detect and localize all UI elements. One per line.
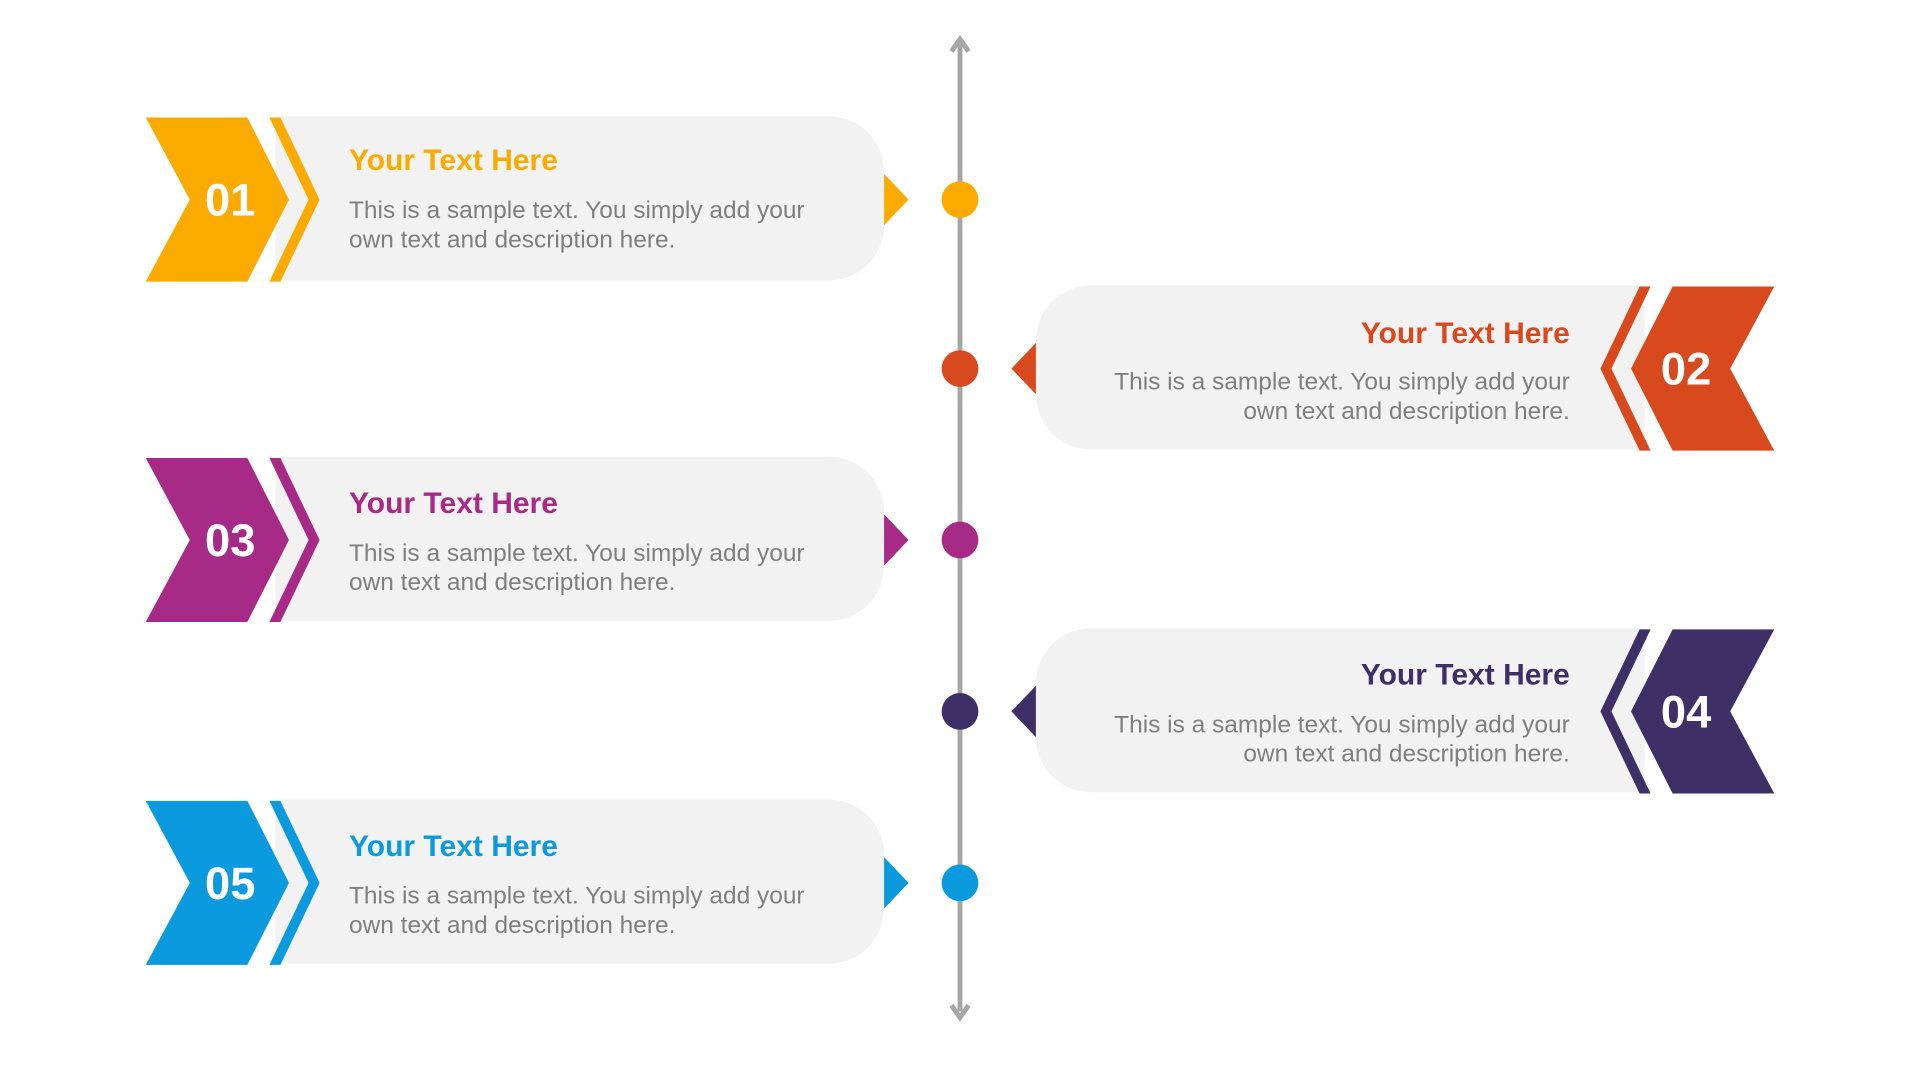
- step 03: [146, 457, 978, 622]
- number 01: 01: [205, 175, 255, 226]
- body 05: own text and description here.: [349, 912, 675, 939]
- body 03: own text and description here.: [349, 569, 675, 596]
- pointer 01: [884, 174, 909, 225]
- step 05: [146, 800, 978, 965]
- heading 01: Your Text Here: [349, 144, 558, 177]
- number 05: 05: [205, 858, 255, 909]
- body 03: This is a sample text. You simply add your: [349, 540, 805, 567]
- number 04: 04: [1661, 686, 1711, 737]
- body 01: own text and description here.: [349, 226, 675, 253]
- heading 02: Your Text Here: [1361, 317, 1570, 350]
- timeline axis: [951, 39, 969, 1018]
- body 04: This is a sample text. You simply add your: [1114, 711, 1570, 738]
- heading 04: Your Text Here: [1361, 658, 1570, 691]
- number 03: 03: [205, 515, 255, 566]
- body 04: own text and description here.: [1243, 741, 1570, 768]
- body 02: This is a sample text. You simply add your: [1114, 368, 1570, 395]
- step 01: [146, 116, 978, 282]
- number 02: 02: [1661, 343, 1711, 394]
- body 02: own text and description here.: [1243, 398, 1570, 425]
- dot 01: [942, 181, 978, 218]
- step 02: [942, 285, 1774, 451]
- heading 03: Your Text Here: [349, 487, 558, 520]
- heading 05: Your Text Here: [349, 830, 558, 863]
- body 05: This is a sample text. You simply add your: [349, 883, 805, 910]
- step 04: [942, 628, 1774, 793]
- chevron 01: [146, 118, 289, 282]
- body 01: This is a sample text. You simply add your: [349, 197, 805, 224]
